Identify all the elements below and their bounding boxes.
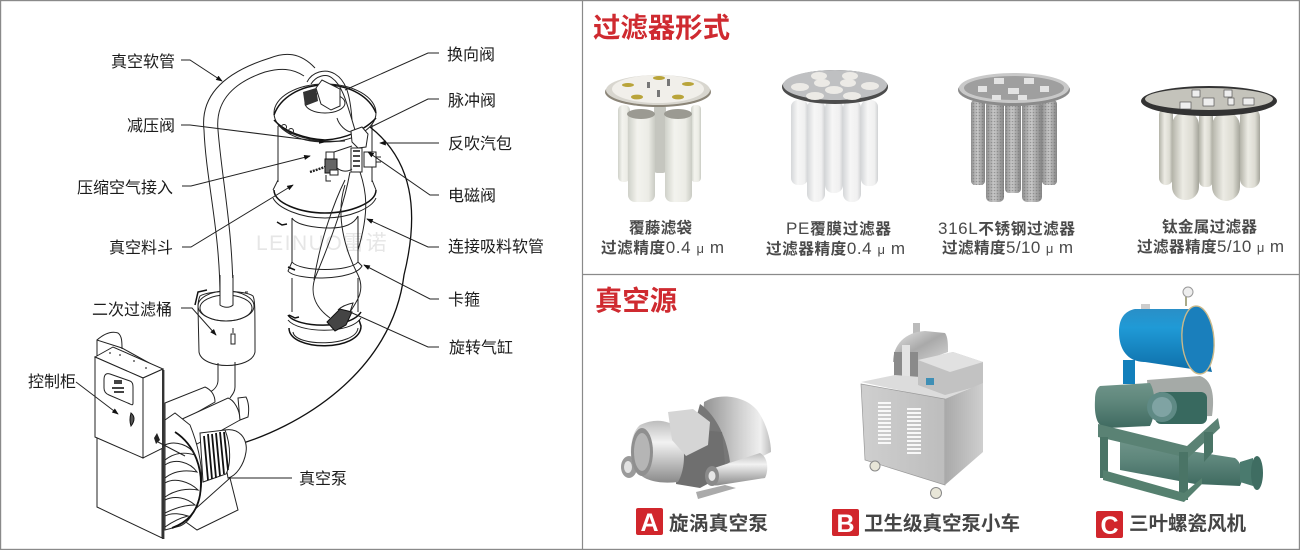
- label: 旋转气缸: 旋转气缸: [449, 338, 513, 357]
- label: 控制柜: 控制柜: [28, 373, 76, 391]
- label: 控制柜: [28, 373, 118, 414]
- label: 卡箍: [364, 265, 480, 309]
- label: 减压阀: 减压阀: [127, 117, 175, 135]
- caption: filter 3: 316L不锈钢过滤器: [938, 219, 1075, 238]
- label A: [636, 508, 768, 537]
- vacuum hose: [204, 54, 315, 298]
- label A: A: [640, 509, 659, 537]
- label: 卡箍: 卡箍: [448, 291, 480, 309]
- caption: filter 1: 过滤精度0.4 μ m: [601, 238, 724, 257]
- callouts: labels and leader lines: [28, 46, 544, 488]
- caption: filter 1: [601, 218, 724, 257]
- label C: 三叶螺瓷风机: [1129, 512, 1246, 535]
- caption: filter 3: [938, 219, 1075, 257]
- label C: C: [1100, 512, 1119, 540]
- label: 电磁阀: 电磁阀: [448, 187, 496, 205]
- pressure reducing valve and air inlet: [310, 146, 352, 181]
- label: 真空软管: [111, 53, 222, 81]
- control cabinet: [95, 332, 164, 539]
- reversing valve on lid: [303, 71, 355, 130]
- label: 二次过滤桶: [92, 301, 216, 335]
- caption: filter 4: 钛金属过滤器: [1162, 217, 1257, 236]
- label: 连接吸料软管: [367, 219, 544, 256]
- label: 真空泵: [228, 470, 347, 488]
- watermark: LEINUO雷诺: [256, 232, 388, 255]
- rotary cylinder: [327, 303, 353, 331]
- air line to pump: [230, 127, 412, 447]
- filter 4: titanium: [1141, 86, 1277, 201]
- label: 二次过滤桶: 二次过滤桶: [92, 301, 172, 319]
- caption: filter 4: 过滤器精度5/10 μ m: [1137, 237, 1284, 256]
- vacuum hopper: [273, 84, 376, 346]
- panel: vacuum conveyor diagram: [28, 46, 544, 539]
- heading: filter types: 过滤器形式: [593, 12, 730, 43]
- label: 真空泵: 真空泵: [299, 470, 347, 488]
- caption: filter 2: PE覆膜过滤器: [786, 219, 891, 238]
- label B: 卫生级真空泵小车: [864, 512, 1020, 535]
- label C: [1096, 511, 1246, 540]
- panel: filter types: [593, 12, 1284, 258]
- label: 压缩空气接入: [77, 156, 310, 197]
- pulse valve and blowback assembly: [313, 118, 381, 318]
- label B: [832, 509, 1020, 538]
- label: 反吹汽包: [380, 135, 512, 153]
- pump B: sanitary vacuum pump cart: [861, 323, 983, 498]
- secondary filter bucket: [195, 275, 255, 366]
- panel: vacuum sources: [595, 285, 1263, 540]
- label B: B: [836, 510, 855, 538]
- caption: filter 1: 覆藤滤袋: [629, 218, 692, 237]
- label: 真空料斗: [109, 185, 293, 257]
- caption: filter 3: 过滤精度5/10 μ m: [942, 238, 1073, 257]
- caption: filter 4: [1137, 217, 1284, 256]
- label: 换向阀: [345, 46, 495, 90]
- filter 3: 316L stainless mesh: [958, 73, 1070, 202]
- label: 换向阀: 换向阀: [447, 46, 495, 64]
- pump A: regenerative blower: [621, 396, 771, 499]
- caption: filter 2: 过滤器精度0.4 μ m: [766, 239, 905, 258]
- label: 电磁阀: [368, 152, 496, 205]
- label: 脉冲阀: [371, 92, 496, 127]
- label: 真空料斗: 真空料斗: [109, 239, 173, 257]
- filter 2: PE membrane: [782, 70, 888, 202]
- vacuum pump: [158, 362, 249, 530]
- label: 真空软管: 真空软管: [111, 53, 175, 71]
- label: 反吹汽包: 反吹汽包: [448, 135, 512, 153]
- filter 1: coated bag: [605, 75, 711, 202]
- label: 脉冲阀: 脉冲阀: [448, 92, 496, 110]
- label: 旋转气缸: [350, 312, 513, 357]
- pump C: roots blower: [1095, 287, 1263, 502]
- label A: 旋涡真空泵: [669, 512, 768, 535]
- heading: vacuum source: 真空源: [595, 285, 677, 316]
- label: 连接吸料软管: 连接吸料软管: [448, 238, 544, 256]
- label: 压缩空气接入: 压缩空气接入: [77, 179, 173, 197]
- caption: filter 2: [766, 219, 905, 258]
- label: 减压阀: [127, 117, 325, 142]
